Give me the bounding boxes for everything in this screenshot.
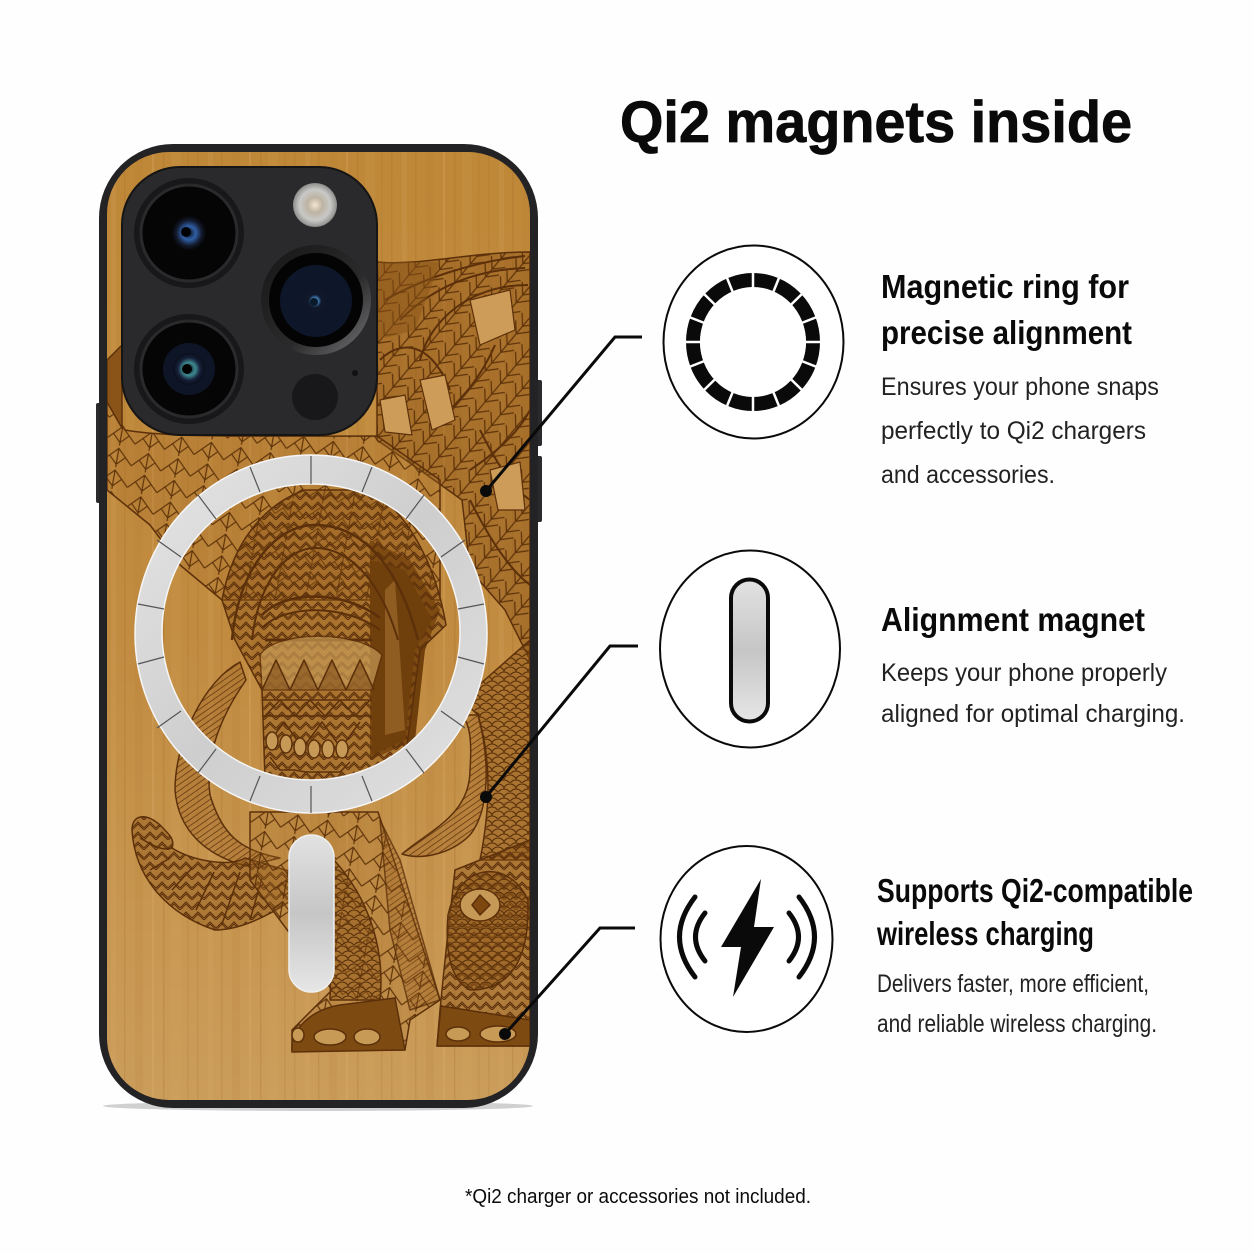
bottom-left lens — [134, 314, 244, 424]
text: alignment magnet: aligned for optimal charging. — [881, 700, 1185, 728]
ear sweeping lines — [380, 256, 530, 585]
back leg — [437, 840, 530, 1046]
headdress arcs — [232, 525, 418, 640]
flash — [293, 183, 337, 227]
back foot — [437, 1006, 530, 1046]
circle row — [266, 732, 348, 758]
text: wireless charging: Delivers faster, more efficient, — [877, 970, 1149, 998]
ear light patches — [380, 290, 525, 510]
microphone and lidar — [292, 374, 338, 420]
case bumper — [99, 144, 538, 1108]
icon: alignment magnet — [660, 550, 840, 748]
engraved elephant — [107, 252, 530, 1052]
elephant ear right — [377, 252, 530, 660]
trunk tip — [132, 817, 292, 930]
footnote: *Qi2 charger or accessories not included. — [465, 1186, 811, 1208]
text: wireless charging: and reliable wireless charging. — [877, 1010, 1157, 1038]
text: wireless charging — [876, 872, 1193, 1038]
right lens — [261, 245, 371, 355]
text: wireless charging: wireless charging — [876, 915, 1094, 952]
right body — [471, 640, 530, 861]
phone case — [96, 144, 542, 1111]
elephant ear left — [107, 400, 440, 600]
text: alignment magnet — [881, 601, 1185, 728]
front leg — [250, 812, 440, 1050]
bamboo back — [107, 152, 530, 1100]
head dark panels — [370, 540, 440, 760]
text: magnetic ring: Ensures your phone snaps — [881, 373, 1159, 401]
title: Qi2 magnets inside — [620, 90, 1132, 155]
text: magnetic ring: precise alignment — [881, 314, 1132, 351]
face panels — [260, 636, 382, 690]
side buttons — [96, 380, 542, 522]
leader line 2 — [480, 646, 638, 803]
left trunk curve — [175, 662, 280, 866]
alignment magnet — [289, 835, 334, 992]
right tusk — [402, 715, 486, 856]
top-left lens — [134, 178, 244, 288]
text: magnetic ring: and accessories. — [881, 461, 1055, 489]
ring segment gaps — [138, 456, 484, 813]
front foot — [292, 998, 405, 1052]
text: magnetic ring: Magnetic ring for — [881, 268, 1129, 305]
leader line 1 — [480, 337, 642, 497]
magnetic ring — [135, 455, 487, 813]
text: alignment magnet: Alignment magnet — [881, 601, 1145, 638]
leader line 3 — [499, 928, 635, 1040]
camera module — [122, 167, 377, 435]
elephant face — [222, 490, 446, 780]
text: magnetic ring — [881, 268, 1159, 489]
text: alignment magnet: Keeps your phone properly — [881, 659, 1167, 687]
icon: wireless charging bolt — [660, 846, 832, 1032]
text: magnetic ring: perfectly to Qi2 chargers — [881, 417, 1146, 445]
icon: magnetic ring — [664, 246, 844, 438]
